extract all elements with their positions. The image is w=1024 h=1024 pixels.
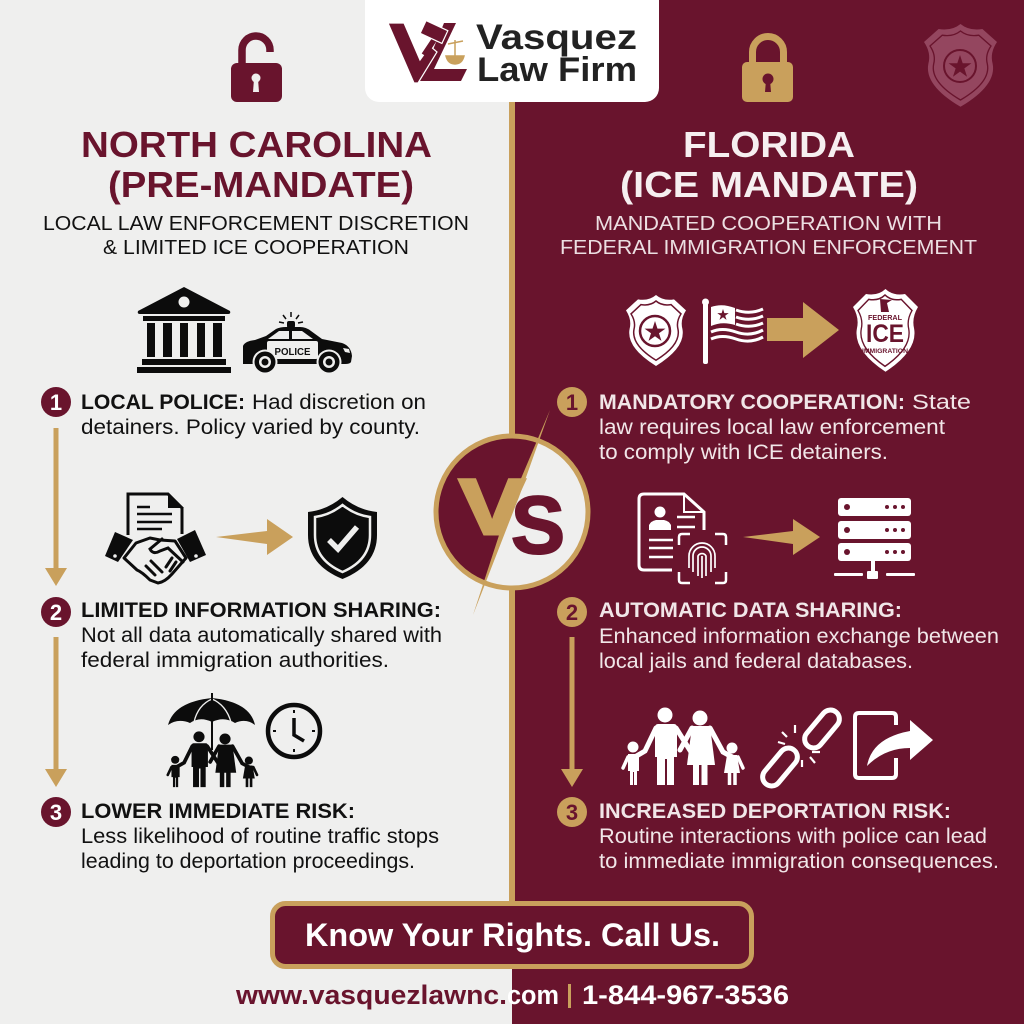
heading: North Carolina: [81, 124, 432, 205]
heading: Florida: [620, 124, 918, 205]
text: automatic data sharing: Enhanced information exchange between: [599, 625, 999, 648]
text: local police: LOCAL POLICE:: [81, 391, 245, 414]
step 3 badge: right: 3: [566, 800, 578, 825]
step 1 badge: right: [557, 387, 587, 417]
text: increased deportation risk: Routine interactions with police can lead: [599, 825, 987, 848]
logo wordmark: [476, 18, 637, 89]
text: local police: [81, 391, 426, 439]
call to action button: Know Your Rights. Call Us.: [305, 917, 720, 953]
logo card: [365, 0, 659, 102]
icon: open padlock: [231, 36, 282, 102]
VS emblem: V: [459, 462, 525, 551]
text: local police: detainers. Policy varied by county.: [81, 416, 420, 439]
text: mandatory cooperation: to comply with ICE detainers.: [599, 441, 888, 464]
step 3 badge: right: [557, 797, 587, 827]
subheading: Florida: MANDATED COOPERATION WITH: [595, 212, 942, 235]
icon: police badge: [626, 295, 686, 366]
contact line: [235, 980, 789, 1010]
subheading: North Carolina: [43, 212, 469, 259]
heading: Florida: (ICE MANDATE): [620, 164, 918, 205]
text: local police: Had discretion on: [252, 391, 426, 414]
arrow: right gold: [743, 519, 820, 555]
icon: shield with check: [308, 497, 377, 579]
text: increased deportation risk: [599, 800, 999, 873]
step 2 badge: right: [557, 597, 587, 627]
text: mandatory cooperation: MANDATORY COOPERATION:: [599, 391, 905, 414]
icon: closed padlock: [742, 36, 793, 102]
VS emblem: [436, 410, 588, 615]
heading: North Carolina: NORTH CAROLINA: [81, 124, 432, 165]
icon: ICE badge: FEDERAL: [868, 315, 903, 322]
icon: clock: [268, 705, 320, 757]
text: mandatory cooperation: [599, 391, 971, 464]
contact line: www.vasquezlawnc.: [235, 980, 507, 1010]
text: increased deportation risk: to immediate immigration consequences.: [599, 850, 999, 873]
subheading: North Carolina: LOCAL LAW ENFORCEMENT DISCRETION: [43, 212, 469, 235]
icon: watermark badge: [924, 24, 997, 107]
panel: right background: [512, 0, 1024, 1024]
call to action button: [272, 904, 752, 966]
text: mandatory cooperation: law requires local law enforcement: [599, 416, 945, 439]
logo mark: [388, 21, 467, 83]
icon: family: [623, 708, 743, 785]
contact line: com: [507, 980, 559, 1010]
arrow: left gold: [216, 519, 293, 555]
logo wordmark: Law Firm: [477, 51, 637, 89]
icon: broken chain: [759, 706, 843, 790]
arrow: right gold large: [767, 302, 839, 358]
text: automatic data sharing: [599, 599, 999, 673]
step 3 badge: left: [41, 797, 71, 827]
icon: umbrella over family: [168, 693, 257, 787]
arrow: left step 2 to 3: [45, 637, 67, 787]
icon: ICE badge: IMMIGRATION: [862, 349, 908, 355]
text: lower immediate risk: leading to deportation proceedings.: [81, 850, 415, 873]
text: lower immediate risk: LOWER IMMEDIATE RISK:: [81, 800, 355, 823]
step 3 badge: left: 3: [50, 800, 62, 825]
step 1 badge: left: 1: [50, 390, 62, 415]
step 2 badge: right: 2: [566, 600, 578, 625]
text: limited information sharing: LIMITED INFORMATION SHARING:: [81, 599, 441, 622]
icon: flag: [702, 298, 763, 364]
subheading: North Carolina: & LIMITED ICE COOPERATION: [103, 236, 409, 259]
text: mandatory cooperation: State: [912, 391, 971, 414]
icon: share arrow: [855, 713, 933, 778]
icon: ICE badge: ICE: [866, 320, 904, 348]
step 2 badge: left: [41, 597, 71, 627]
icon: document and handshake: [105, 493, 206, 583]
text: limited information sharing: Not all data automatically shared with: [81, 624, 442, 647]
text: lower immediate risk: [81, 800, 439, 873]
step 1 badge: left: [41, 387, 71, 417]
VS emblem: S: [511, 480, 565, 571]
text: automatic data sharing: local jails and federal databases.: [599, 650, 913, 673]
icon: ICE badge: [853, 289, 918, 372]
icon: police car: POLICE: [274, 347, 311, 358]
panel: left background: [0, 0, 512, 1024]
text: lower immediate risk: Less likelihood of routine traffic stops: [81, 825, 439, 848]
subheading: Florida: [560, 212, 977, 259]
heading: Florida: FLORIDA: [683, 124, 855, 165]
arrow: right step 2 to 3: [561, 637, 583, 787]
icon: police car: [243, 312, 352, 374]
text: automatic data sharing: AUTOMATIC DATA SHARING:: [599, 599, 902, 622]
step 2 badge: left: 2: [50, 600, 62, 625]
subheading: Florida: FEDERAL IMMIGRATION ENFORCEMENT: [560, 236, 977, 259]
center gold divider: [509, 100, 515, 905]
text: limited information sharing: federal immigration authorities.: [81, 649, 389, 672]
text: increased deportation risk: INCREASED DEPORTATION RISK:: [599, 800, 951, 823]
icon: server stack: [834, 498, 915, 579]
heading: North Carolina: (PRE-MANDATE): [108, 164, 414, 205]
icon: document with fingerprint: [639, 494, 726, 583]
step 1 badge: right: 1: [566, 390, 578, 415]
contact line: 1-844-967-3536: [582, 980, 789, 1010]
text: limited information sharing: [81, 599, 442, 672]
arrow: left step 1 to 2: [45, 428, 67, 586]
logo wordmark: Vasquez: [476, 18, 637, 57]
icon: courthouse: [137, 287, 231, 373]
